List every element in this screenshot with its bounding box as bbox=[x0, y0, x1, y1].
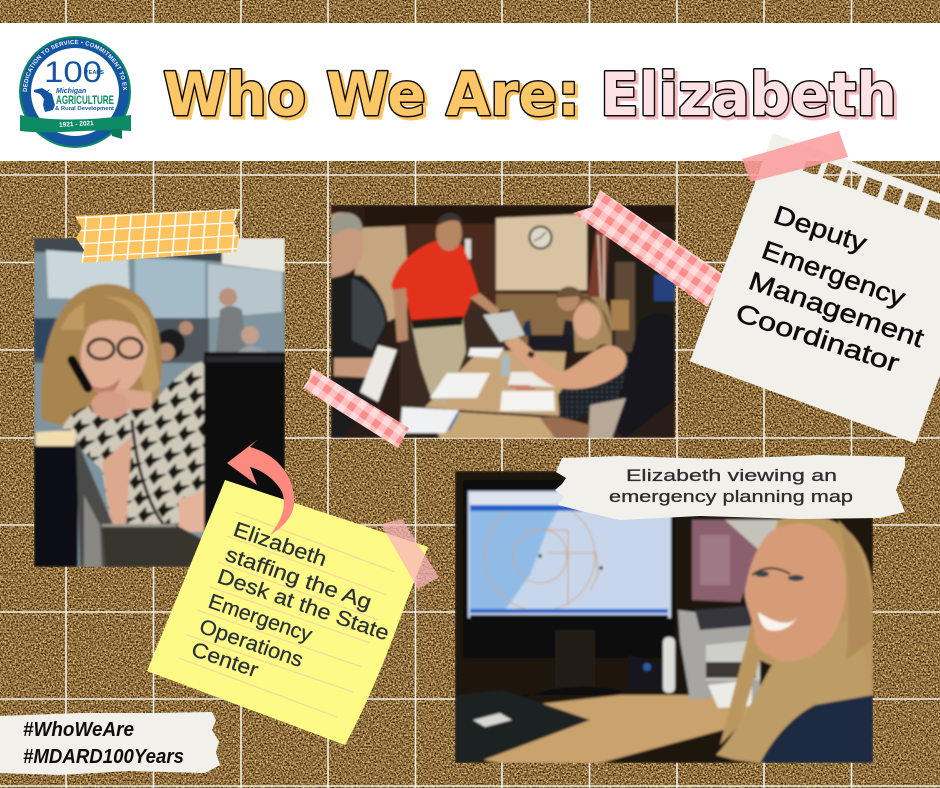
washi tape: pink gingham lower bbox=[303, 368, 409, 448]
sticky note text: Operations bbox=[196, 615, 306, 672]
logo: MDARD 100 years seal bbox=[19, 36, 131, 148]
water bottle bbox=[501, 355, 510, 376]
department wordmark: Michigan bbox=[56, 88, 86, 95]
anniversary ribbon bbox=[20, 115, 131, 132]
job title text: Management bbox=[745, 265, 929, 354]
100 numeral: 100 bbox=[44, 56, 102, 89]
pink tape bbox=[381, 519, 439, 589]
desk bbox=[455, 695, 760, 763]
hashtags bbox=[23, 719, 184, 768]
sample bag bbox=[483, 311, 525, 342]
job title text: Emergency bbox=[758, 234, 909, 313]
washi tape: yellow grid bbox=[75, 209, 240, 263]
table papers bbox=[468, 348, 504, 358]
washi tape: pink gingham top bbox=[573, 190, 727, 307]
hashtag strip bbox=[0, 712, 220, 775]
photo: Elizabeth on the phone at the Ag Desk bbox=[34, 238, 285, 567]
man at left bbox=[331, 212, 397, 438]
note: yellow sticky caption bbox=[147, 480, 439, 745]
map caption text: Elizabeth viewing an bbox=[626, 466, 837, 485]
department wordmark: & Rural Development bbox=[55, 106, 114, 112]
ribbon fold bbox=[112, 129, 122, 139]
map screen bbox=[470, 493, 668, 615]
pink folder bbox=[692, 520, 762, 602]
department wordmark bbox=[55, 88, 114, 112]
title text: Who We Are: bbox=[163, 60, 580, 130]
years label: YEARS bbox=[85, 70, 104, 76]
sticky note text: Center bbox=[188, 638, 261, 682]
Michigan mitten map bbox=[34, 88, 55, 112]
sticky note text: staffing the Ag bbox=[222, 543, 375, 615]
Elizabeth bbox=[504, 296, 634, 420]
laptop bbox=[455, 690, 590, 762]
sticky note text: Desk at the State bbox=[214, 565, 392, 645]
printer bbox=[678, 610, 760, 700]
note: Deputy Emergency Management Coordinator bbox=[690, 131, 940, 443]
hashtags: #WhoWeAre bbox=[23, 719, 134, 741]
map caption text: emergency planning map bbox=[609, 487, 853, 506]
sticky note text: Elizabeth bbox=[230, 518, 330, 571]
woman behind bbox=[556, 287, 584, 355]
title shadow bbox=[166, 63, 900, 133]
department wordmark: AGRICULTURE bbox=[56, 95, 114, 107]
person foreground right bbox=[540, 314, 675, 438]
sticky note text bbox=[188, 518, 392, 682]
title shadow: Who We Are: bbox=[166, 63, 583, 133]
job title text: Coordinator bbox=[732, 297, 903, 378]
job title text: Deputy bbox=[770, 199, 871, 258]
map caption text bbox=[609, 466, 853, 506]
perforated paper bbox=[690, 133, 940, 443]
ruled lines bbox=[179, 512, 395, 717]
header band bbox=[0, 23, 940, 161]
title bbox=[163, 60, 900, 133]
webcam cradle bbox=[628, 655, 665, 690]
job title text bbox=[732, 199, 929, 378]
sticky note text: Emergency bbox=[205, 590, 315, 647]
title shadow: Elizabeth bbox=[603, 63, 900, 133]
title text: Elizabeth bbox=[600, 60, 897, 130]
man in red shirt bbox=[391, 213, 500, 405]
arrow: curved coral pointing to photo bbox=[227, 440, 294, 535]
monitor stand bbox=[555, 630, 595, 690]
hashtags: #MDARD100Years bbox=[23, 746, 184, 768]
caption strip: map caption bbox=[555, 455, 905, 520]
photo: Elizabeth at a table receiving a sample bag bbox=[331, 205, 675, 438]
ribbon years: 1921 - 2021 bbox=[59, 120, 94, 129]
title text bbox=[163, 60, 897, 130]
clock bbox=[530, 226, 552, 248]
photo: Elizabeth at a planning map monitor bbox=[455, 471, 873, 763]
pink tape bbox=[742, 131, 848, 182]
woman bbox=[716, 516, 873, 763]
